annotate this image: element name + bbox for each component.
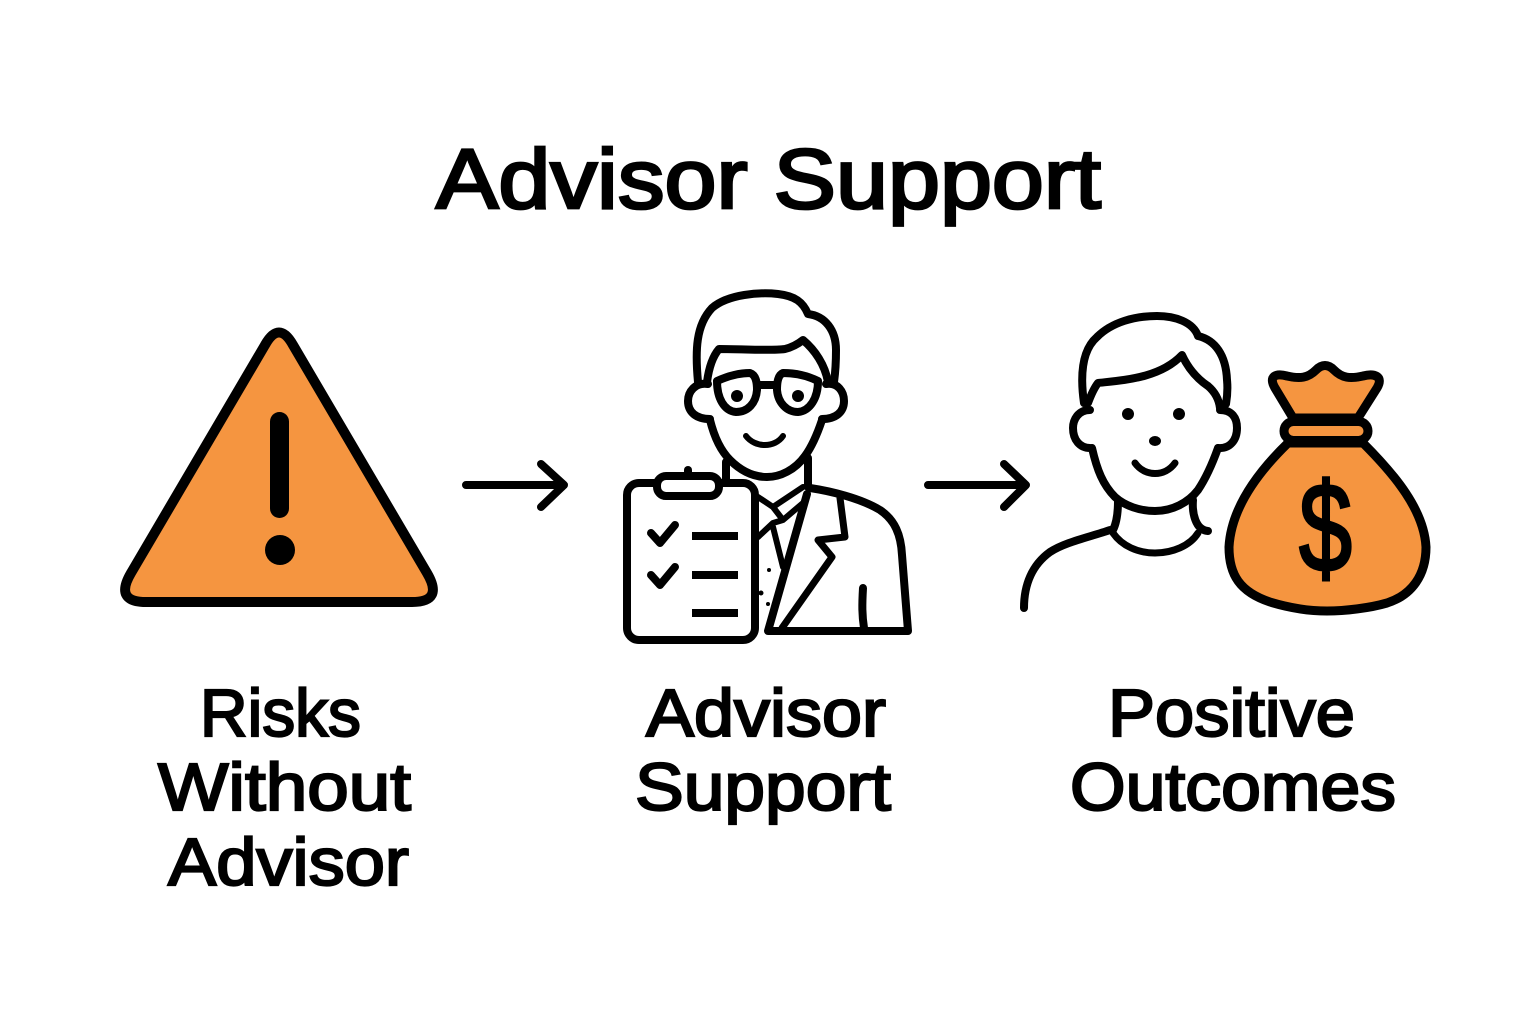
- label: positive outcomes: Outcomes: [1070, 750, 1396, 825]
- panel: positive outcomes: [1024, 316, 1426, 825]
- label: advisor support: Advisor: [646, 676, 886, 751]
- title: Advisor Support: [436, 132, 1101, 226]
- arrow: risks to advisor: [466, 464, 564, 507]
- icon: money bag: $: [1299, 457, 1352, 598]
- label: positive outcomes: [1070, 676, 1396, 825]
- label: risks without advisor: [158, 676, 411, 900]
- icon: smiling person: [1024, 316, 1237, 608]
- label: risks without advisor: Risks: [200, 676, 361, 751]
- icon: money bag: [1229, 366, 1426, 611]
- panel: advisor support: [627, 293, 908, 825]
- icon: warning triangle: [125, 332, 433, 602]
- label: positive outcomes: Positive: [1108, 676, 1355, 751]
- label: advisor support: [635, 676, 891, 825]
- panel: risks without advisor: [125, 332, 433, 900]
- label: advisor support: Support: [635, 750, 891, 825]
- label: risks without advisor: Advisor: [168, 825, 409, 900]
- label: risks without advisor: Without: [158, 750, 411, 825]
- icon: advisor with clipboard: [627, 293, 908, 640]
- arrow: advisor to outcomes: [928, 464, 1026, 507]
